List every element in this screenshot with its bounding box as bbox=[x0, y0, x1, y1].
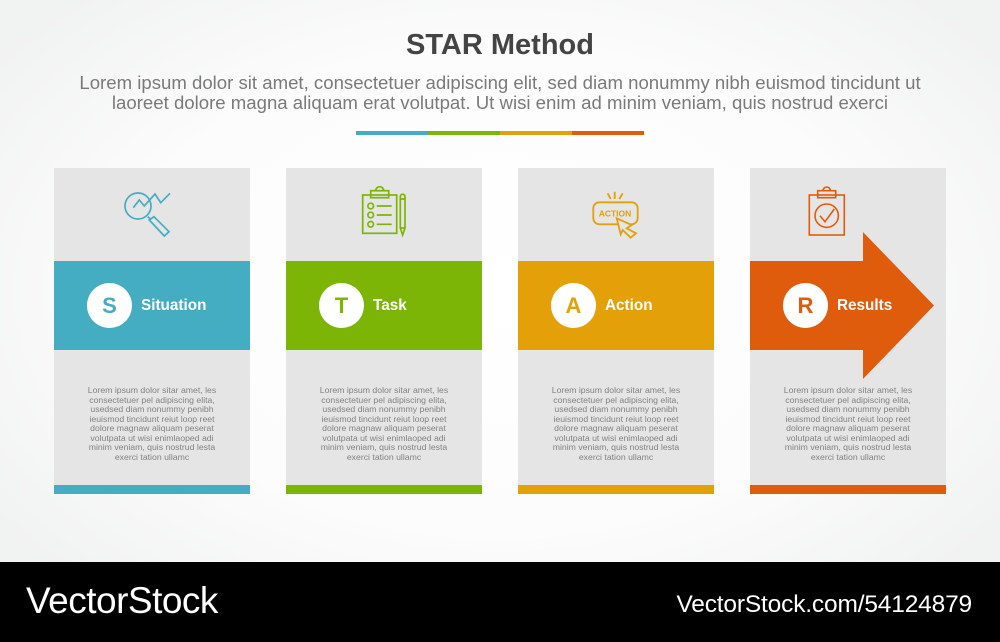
body text: task: consectetuer pel adipiscing elita, bbox=[321, 394, 447, 404]
panel: task bbox=[286, 168, 482, 494]
icon: clipboard with check bbox=[808, 186, 846, 236]
body text: task: volutpata ut wisi enimlaoped adi bbox=[322, 432, 446, 442]
letter badge S bbox=[87, 283, 132, 328]
letter badge T bbox=[319, 283, 364, 328]
letter badge A bbox=[551, 283, 596, 328]
label: task: Task bbox=[373, 297, 407, 314]
letter badge T: T bbox=[335, 293, 348, 318]
title: STAR Method bbox=[406, 29, 594, 61]
body text: situation: exerci tation ullamc bbox=[115, 452, 189, 462]
body text: situation: usedsed diam nonummy penibh bbox=[90, 404, 214, 414]
body text: situation: ieuismod tincidunt reiut loop reet bbox=[89, 414, 215, 424]
icon: action button with cursor bbox=[592, 192, 639, 239]
body text: results: ieuismod tincidunt reiut loop reet bbox=[785, 414, 911, 424]
body text: situation: Lorem ipsum dolor sitar amet, les bbox=[88, 385, 216, 395]
band: situation bbox=[54, 261, 250, 350]
body text: situation: minim veniam, quis nostrud lesta bbox=[89, 442, 215, 452]
footer bar: situation bbox=[54, 485, 250, 494]
body text: task: ieuismod tincidunt reiut loop reet bbox=[321, 414, 447, 424]
icon: magnifier with chart bbox=[124, 192, 170, 238]
band: action bbox=[518, 261, 714, 350]
body text: results: consectetuer pel adipiscing elita, bbox=[785, 394, 911, 404]
body text: results bbox=[784, 385, 912, 462]
body text: action: consectetuer pel adipiscing elita, bbox=[553, 394, 679, 404]
footer bar: action bbox=[518, 485, 714, 494]
body text: task: exerci tation ullamc bbox=[347, 452, 421, 462]
body text: results: minim veniam, quis nostrud lesta bbox=[785, 442, 911, 452]
letter badge A: A bbox=[566, 293, 581, 318]
watermark footer bbox=[0, 562, 1000, 642]
body text: situation: consectetuer pel adipiscing elita, bbox=[89, 394, 215, 404]
body text: results: dolore magnaw aliquam peserat bbox=[786, 423, 910, 433]
body text: action: minim veniam, quis nostrud lesta bbox=[553, 442, 679, 452]
body text: task: Lorem ipsum dolor sitar amet, les bbox=[320, 385, 448, 395]
subtitle text bbox=[79, 72, 921, 113]
image url: VectorStock.com/54124879 bbox=[676, 591, 972, 618]
panel: results bbox=[750, 168, 946, 494]
body text: action: Lorem ipsum dolor sitar amet, les bbox=[552, 385, 680, 395]
body text: results: Lorem ipsum dolor sitar amet, les bbox=[784, 385, 912, 395]
icon: action button with cursor: ACTION bbox=[599, 208, 631, 218]
letter badge R bbox=[783, 283, 828, 328]
icon: clipboard checklist and pencil bbox=[362, 186, 406, 238]
label: situation: Situation bbox=[141, 297, 206, 314]
body text: action: usedsed diam nonummy penibh bbox=[554, 404, 678, 414]
body text: results: usedsed diam nonummy penibh bbox=[786, 404, 910, 414]
body text: action: ieuismod tincidunt reiut loop reet bbox=[553, 414, 679, 424]
body text: task: minim veniam, quis nostrud lesta bbox=[321, 442, 447, 452]
body text: action: exerci tation ullamc bbox=[579, 452, 653, 462]
body text: results: volutpata ut wisi enimlaoped adi bbox=[786, 432, 910, 442]
body text: situation bbox=[88, 385, 216, 462]
subtitle text: laoreet dolore magna aliquam erat volutpat. Ut wisi enim ad minim veniam, quis nostrud exerci bbox=[112, 92, 888, 113]
letter badge S: S bbox=[102, 293, 117, 318]
body text: situation: volutpata ut wisi enimlaoped adi bbox=[90, 432, 214, 442]
arrow band: results bbox=[750, 232, 934, 379]
body text: action: volutpata ut wisi enimlaoped adi bbox=[554, 432, 678, 442]
body text: situation: dolore magnaw aliquam peserat bbox=[90, 423, 214, 433]
panel: situation bbox=[54, 168, 250, 494]
subtitle text: Lorem ipsum dolor sit amet, consectetuer adipiscing elit, sed diam nonummy nibh euismod tincidunt ut bbox=[79, 72, 921, 93]
body text: action: dolore magnaw aliquam peserat bbox=[554, 423, 678, 433]
footer bar: results bbox=[750, 485, 946, 494]
body text: task: usedsed diam nonummy penibh bbox=[322, 404, 446, 414]
letter badge R: R bbox=[798, 293, 813, 318]
band: task bbox=[286, 261, 482, 350]
label: action: Action bbox=[605, 297, 653, 314]
footer bar: task bbox=[286, 485, 482, 494]
body text: task bbox=[320, 385, 448, 462]
label: results: Results bbox=[837, 297, 892, 314]
brand name: VectorStock bbox=[26, 580, 218, 621]
body text: results: exerci tation ullamc bbox=[811, 452, 885, 462]
panel: action bbox=[518, 168, 714, 494]
body text: task: dolore magnaw aliquam peserat bbox=[322, 423, 446, 433]
body text: action bbox=[552, 385, 680, 462]
four colour divider bbox=[356, 131, 644, 135]
